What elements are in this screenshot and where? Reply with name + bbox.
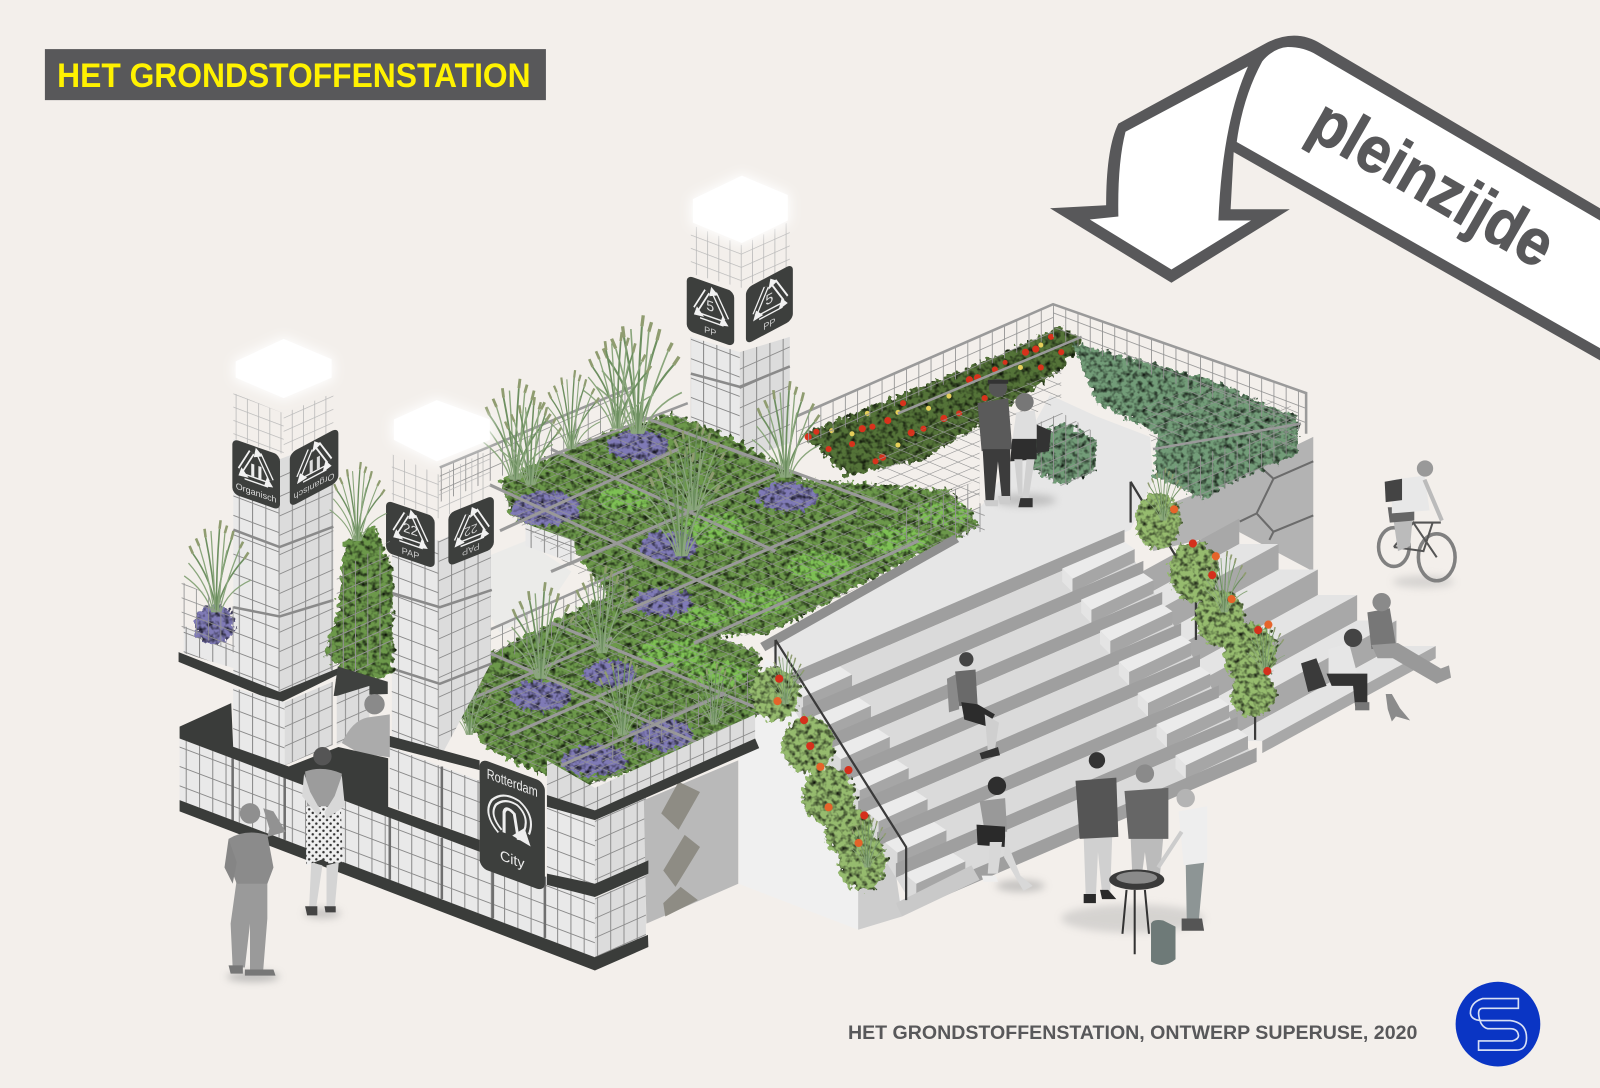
column base behind counter <box>233 682 333 765</box>
terrace steps on the right <box>1066 518 1436 753</box>
sign: PAP left: PAP <box>402 546 419 562</box>
sign: PP right <box>746 264 793 345</box>
concrete seating staircase <box>783 530 1257 916</box>
person: woman seated on stairs <box>947 652 1000 759</box>
person grilling <box>1158 789 1207 931</box>
light box 3 <box>691 174 790 245</box>
bird <box>1386 694 1410 722</box>
sign: Organisch right (mirrored): Organisch <box>294 470 334 501</box>
person: cyclist <box>1379 460 1455 588</box>
backpack <box>1301 658 1327 692</box>
arrow: pleinzijde <box>1050 36 1600 360</box>
dark bands on tower corner <box>180 738 759 971</box>
opening in planter deck <box>488 541 571 633</box>
bright green beds <box>598 485 972 687</box>
white side wall of staircase <box>739 658 908 930</box>
rail grid over planting <box>500 413 980 638</box>
dark counter slab and band <box>180 703 480 852</box>
lower planting strip <box>449 592 760 788</box>
deck edge toward plaza <box>760 535 959 651</box>
sign: PP left: 5 <box>706 298 714 316</box>
stone wall with diamonds <box>644 760 738 924</box>
planter on upper slab, left <box>182 520 251 668</box>
man with jacket <box>1076 752 1118 903</box>
person: woman seated lower <box>977 777 1045 892</box>
sign: PAP right (upside down) <box>448 495 494 566</box>
title: HET GRONDSTOFFENSTATION <box>57 57 531 95</box>
sign: Rotterdam City: City <box>500 848 525 873</box>
sign: PAP left: 22 <box>403 520 418 539</box>
retaining wall with hexagon paving <box>1153 437 1313 572</box>
sign: PAP right (upside down): 22 <box>464 520 478 540</box>
rail cages around top terrace <box>796 304 1306 500</box>
lower tank rows <box>180 738 646 959</box>
man with cap <box>1124 764 1168 884</box>
planting with poppies, left <box>751 652 887 891</box>
upper dark slab <box>179 652 340 703</box>
arrow: pleinzijde: pleinzijde <box>1298 84 1568 282</box>
column 3: PP tower <box>687 174 793 460</box>
lavender beds <box>510 430 818 776</box>
panel: tomato planters <box>801 327 1084 476</box>
light box 2 <box>392 398 492 463</box>
seated person front <box>1327 629 1369 710</box>
sign: Rotterdam City: Rotterdam <box>487 767 538 801</box>
person: barbecue group <box>1061 752 1207 965</box>
sign: PP right: PP <box>763 316 776 333</box>
handrails <box>776 482 1255 900</box>
panel: leafy cabbage planters <box>1029 342 1298 500</box>
rail walls <box>440 387 633 502</box>
person: counter man <box>342 694 390 757</box>
sign: PAP right (upside down): PAP <box>462 540 480 557</box>
thick rails <box>459 413 918 765</box>
upper planting strip <box>500 413 980 638</box>
small tank next to counter man <box>337 686 369 745</box>
column 2: PAP tower <box>386 398 494 760</box>
grill <box>1109 870 1176 965</box>
planting with poppies, right <box>1136 468 1285 716</box>
sign: PP left: PP <box>704 324 716 339</box>
sign: Rotterdam City <box>480 758 545 892</box>
people: two sitting on terrace with bird <box>1301 593 1451 722</box>
sign: Organisch left: Organisch <box>236 481 277 505</box>
sign: PP right: 5 <box>765 289 773 309</box>
person: man at tank (back view) <box>224 803 286 982</box>
sign: Organisch right (mirrored) <box>290 427 338 507</box>
paved plaza walkway <box>770 395 1153 684</box>
logo: Superuse <box>1456 982 1540 1066</box>
hanging plant between towers <box>318 462 393 686</box>
footer credit: HET GRONDSTOFFENSTATION, ONTWERP SUPERUSE, 2020 <box>848 1022 1417 1044</box>
sign: PP left <box>687 275 734 347</box>
dark counter back <box>334 666 388 696</box>
person: woman in polka-dot skirt <box>302 747 345 918</box>
sign: PAP left <box>386 500 435 569</box>
dark upper band, back row <box>390 736 480 770</box>
sign: Organisch left <box>232 438 280 510</box>
panel: main planter deck with plants <box>440 315 985 788</box>
person: couple on plaza <box>978 379 1056 507</box>
light box 1 <box>234 337 334 400</box>
white planter box at opening <box>526 524 574 563</box>
seated person back <box>1367 593 1451 684</box>
column 1: Organisch tower <box>232 337 338 694</box>
grass tufts <box>480 379 553 480</box>
planter boxes above band <box>547 714 755 810</box>
